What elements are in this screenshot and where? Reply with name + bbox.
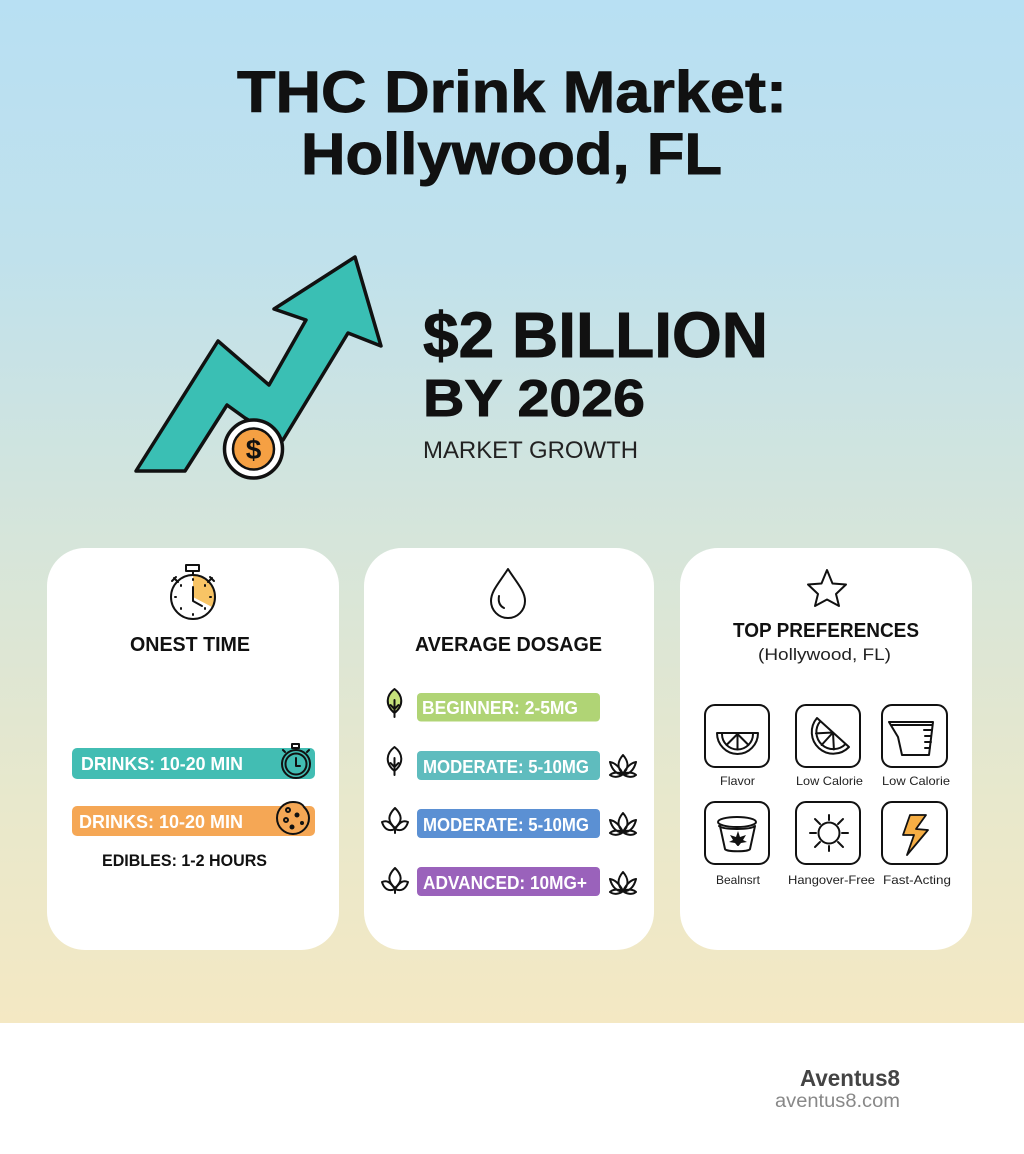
- market growth statistic: $2 BILLION: [423, 299, 768, 371]
- item: fast-acting: Fast-Acting: [883, 873, 951, 887]
- footer branding: Aventus8: [800, 1065, 900, 1091]
- icon: rising arrow with dollar coin: $: [246, 434, 262, 465]
- item: flavor: [705, 705, 769, 788]
- row: moderate blue: MODERATE: 5-10MG: [423, 815, 589, 835]
- market growth statistic: [423, 299, 768, 464]
- item: low calorie citrus: [796, 705, 863, 788]
- item: hangover-free: [788, 802, 875, 887]
- market growth statistic: MARKET GROWTH: [423, 437, 638, 464]
- heading: average dosage: AVERAGE DOSAGE: [415, 634, 602, 656]
- item: hangover-free: Hangover-Free: [788, 873, 875, 887]
- panel: average dosage: [364, 548, 654, 950]
- item: low calorie measuring cup: Low Calorie: [882, 774, 950, 788]
- heading: top preferences: [733, 620, 919, 664]
- item: low calorie citrus: Low Calorie: [796, 774, 863, 788]
- heading: top preferences: (Hollywood, FL): [758, 645, 891, 664]
- title: [237, 60, 787, 187]
- title: Hollywood, FL: [301, 122, 722, 187]
- row: beginner: [387, 689, 600, 722]
- bar: edibles: DRINKS: 10-20 MIN: [79, 812, 243, 832]
- icon: cookie: [277, 802, 309, 834]
- row: moderate teal: MODERATE: 5-10MG: [423, 757, 589, 777]
- market growth statistic: BY 2026: [423, 370, 645, 428]
- text: edibles onset: EDIBLES: 1-2 HOURS: [102, 851, 267, 870]
- heading: top preferences: TOP PREFERENCES: [733, 620, 919, 642]
- panel: onset time: [47, 548, 339, 950]
- bar: drinks: [72, 748, 315, 779]
- icon: stopwatch: [171, 565, 215, 619]
- heading: onest time: ONEST TIME: [130, 634, 250, 656]
- item: jar with leaf: Bealnsrt: [716, 873, 761, 887]
- icon: star: [808, 570, 846, 606]
- row: beginner: BEGINNER: 2-5MG: [422, 698, 578, 718]
- bar: drinks: DRINKS: 10-20 MIN: [81, 754, 243, 774]
- icon: drop: [491, 569, 525, 618]
- row: advanced: [382, 867, 636, 896]
- title: THC Drink Market:: [237, 60, 787, 125]
- panel: top preferences: [680, 548, 972, 950]
- icon: small stopwatch: [282, 744, 310, 778]
- footer branding: aventus8.com: [775, 1091, 900, 1112]
- row: moderate blue: [382, 808, 636, 838]
- bar: edibles: [72, 806, 315, 836]
- item: low calorie measuring cup: [882, 705, 950, 788]
- item: jar with leaf: [705, 802, 769, 887]
- icon: rising arrow with dollar coin: [136, 257, 381, 478]
- item: flavor: Flavor: [720, 774, 755, 788]
- item: fast-acting: [882, 802, 951, 887]
- row: advanced: ADVANCED: 10MG+: [423, 873, 587, 893]
- footer branding: [775, 1065, 900, 1112]
- row: moderate teal: [388, 747, 636, 780]
